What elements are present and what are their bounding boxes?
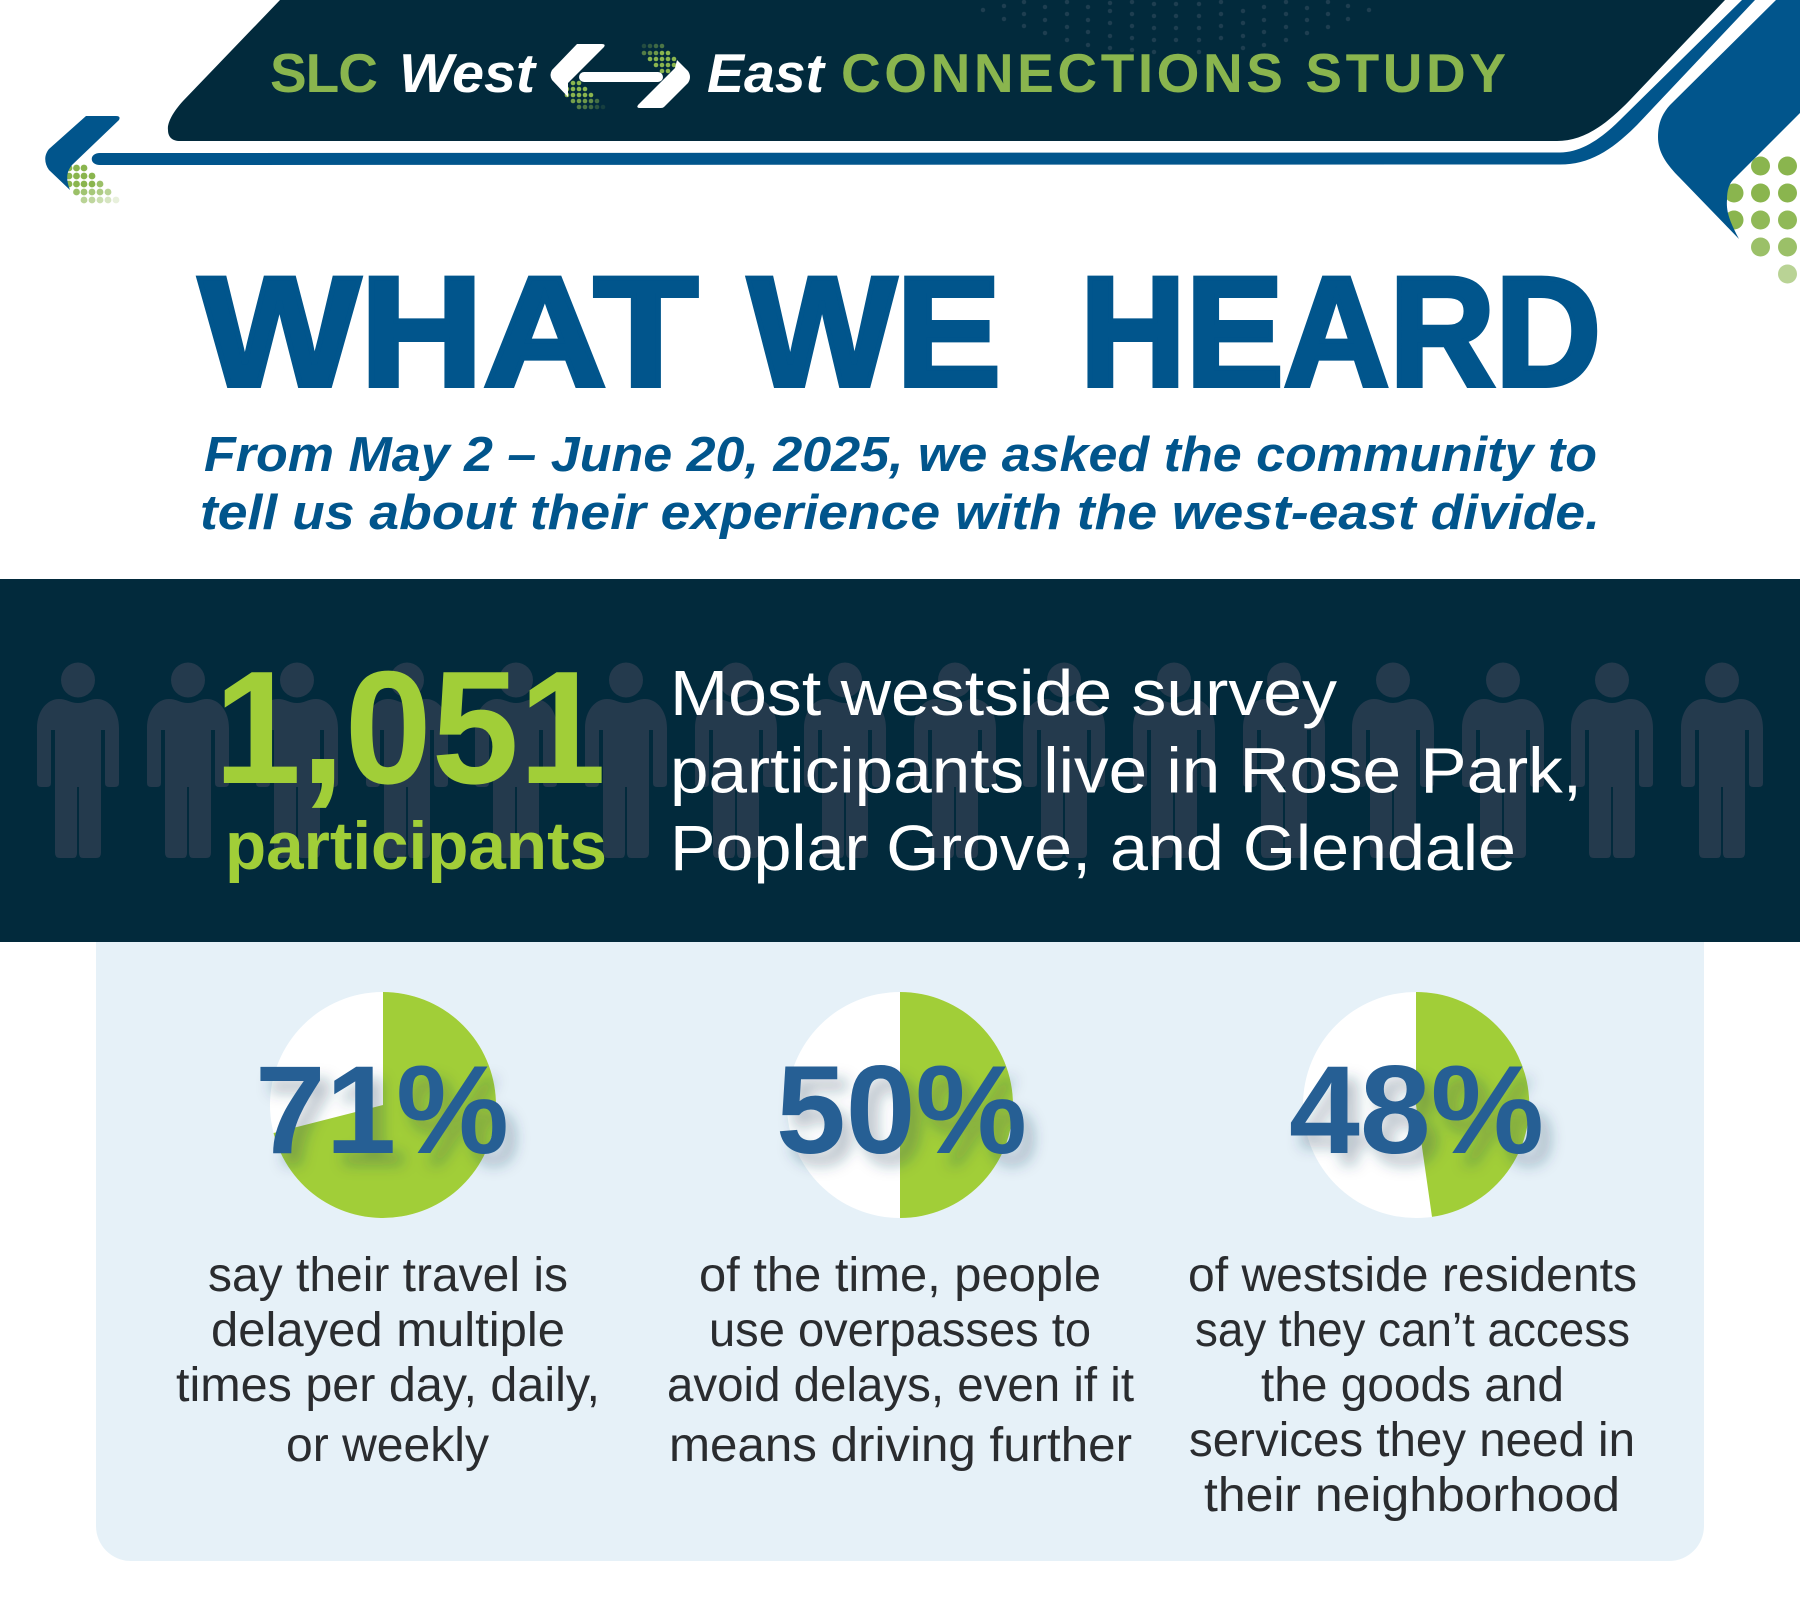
panel: participants band [0, 579, 1800, 942]
text: 71% description: times per day, daily, [176, 1359, 600, 1412]
stat: 1,051 participants: participants [225, 808, 607, 884]
text: where participants live: Poplar Grove, and Glendale [670, 812, 1516, 884]
stat: 1,051 participants: 1,051 [214, 638, 606, 818]
stat: 50% [667, 992, 1134, 1472]
stat: 48%: 48% [1289, 1041, 1544, 1180]
stat: 48% [1188, 992, 1637, 1522]
decoration: left arrow with dots [45, 116, 120, 203]
text: 48% description [1188, 1249, 1637, 1522]
header title: SLC West East Connections Study [270, 42, 1506, 104]
header title: SLC West East Connections Study: CONNECTIONS STUDY [841, 42, 1506, 104]
subtitle [200, 428, 1600, 540]
stat: 50%: 50% [776, 1041, 1027, 1180]
header title: SLC West East Connections Study: SLC [270, 42, 378, 104]
panel: statistics [96, 942, 1704, 1561]
icon: two-way arrow [550, 44, 690, 109]
pie chart: 48% [1303, 992, 1529, 1218]
text: 71% description: say their travel is [208, 1249, 568, 1302]
header banner [168, 0, 1725, 141]
header title: SLC West East Connections Study: East [707, 42, 827, 104]
pie chart: 71% [270, 992, 496, 1218]
decoration: right arrow with dots [1658, 0, 1800, 284]
text: 50% description: avoid delays, even if it [667, 1359, 1134, 1412]
rail: blue line under header [92, 0, 1755, 165]
text: 71% description: or weekly [286, 1419, 489, 1472]
text: 50% description: means driving further [669, 1419, 1132, 1472]
title: WHAT [199, 246, 698, 420]
subtitle: tell us about their experience with the west-east divide. [200, 486, 1600, 540]
text: 50% description: of the time, people [699, 1249, 1101, 1302]
text: where participants live: Most westside survey [670, 657, 1337, 729]
header title: SLC West East Connections Study: West [399, 42, 538, 104]
stat: 71%: 71% [255, 1041, 509, 1180]
text: 50% description: use overpasses to [709, 1304, 1091, 1357]
text: where participants live: participants live in Rose Park, [670, 734, 1582, 806]
text: 71% description [176, 1249, 600, 1472]
text: 48% description: their neighborhood [1204, 1469, 1620, 1522]
subtitle: From May 2 – June 20, 2025, we asked the community to [204, 428, 1597, 482]
text: 48% description: services they need in [1189, 1414, 1635, 1467]
text: 50% description [667, 1249, 1134, 1472]
text: 48% description: of westside residents [1188, 1249, 1637, 1302]
text: 71% description: delayed multiple [211, 1304, 565, 1357]
stat: 71% [176, 992, 600, 1472]
title [199, 246, 1601, 420]
title: WE [748, 246, 1001, 420]
text: 48% description: say they can’t access [1195, 1304, 1630, 1357]
text: where participants live [670, 657, 1582, 884]
text: 48% description: the goods and [1261, 1359, 1564, 1412]
pie chart: 50% [787, 992, 1013, 1218]
icon: row of people [37, 662, 1763, 858]
title: HEARD [1080, 246, 1601, 420]
